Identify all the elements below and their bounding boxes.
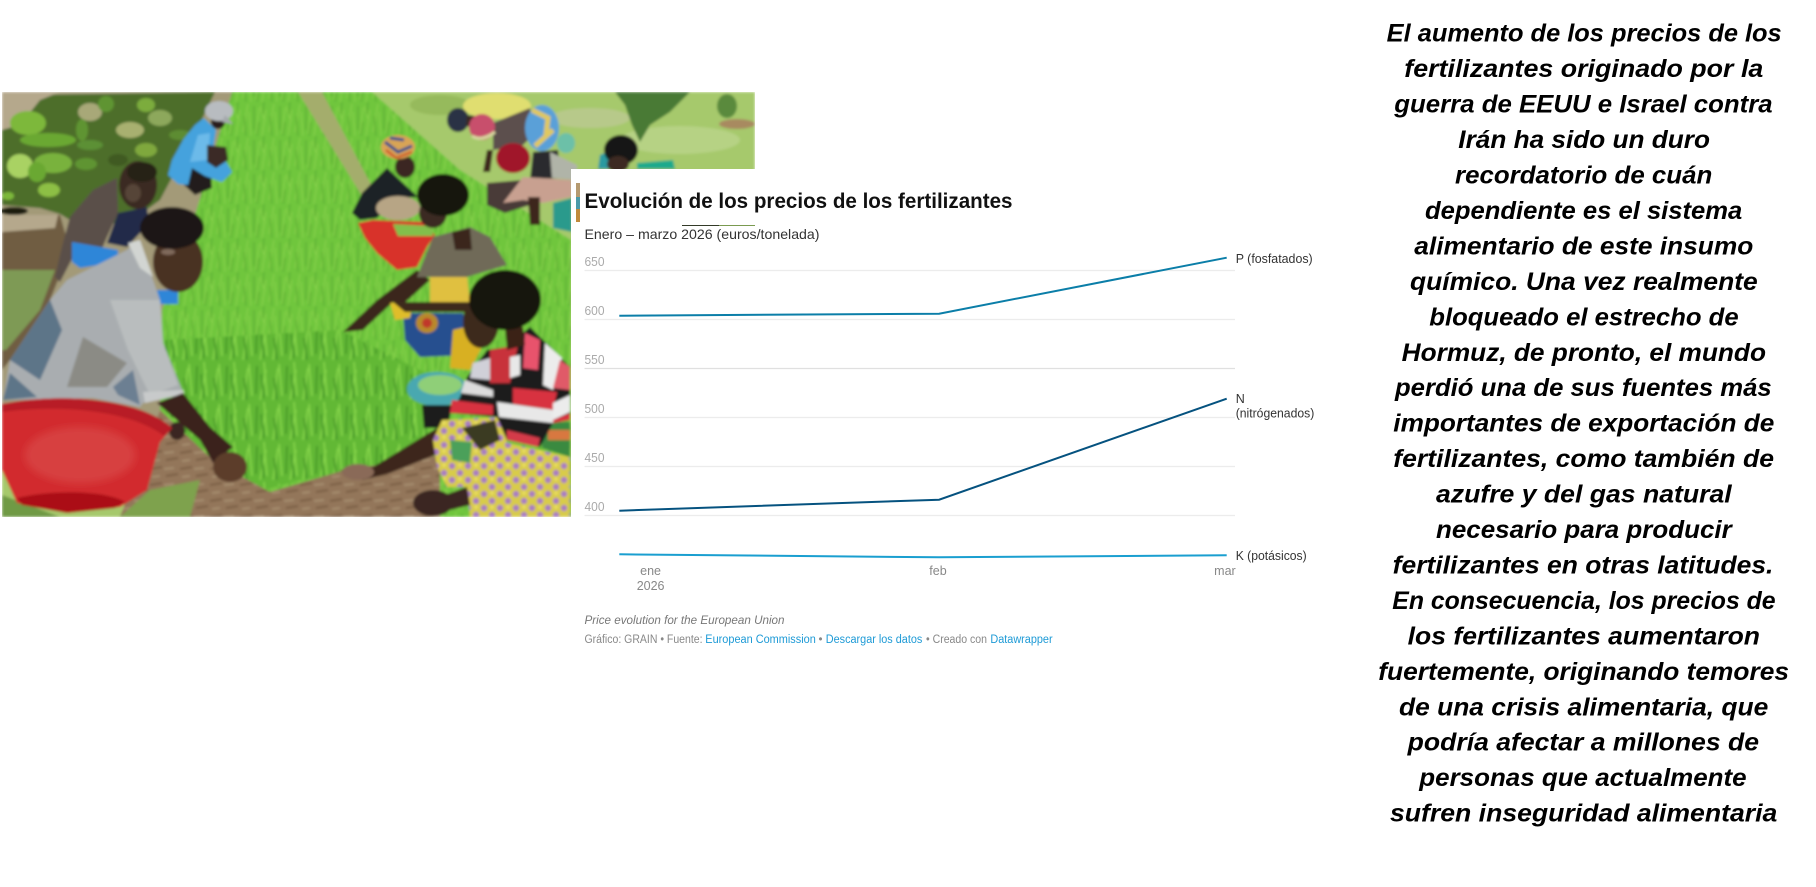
x-axis labels	[637, 564, 1236, 593]
text block: explanatory paragraph: importantes de exportación de	[1393, 410, 1774, 438]
y-axis labels: 550	[584, 353, 605, 367]
text block: explanatory paragraph: recordatorio de cuán	[1455, 162, 1712, 190]
x-axis labels: ene	[640, 564, 661, 578]
chart credits	[584, 634, 1053, 646]
text block: explanatory paragraph: Hormuz, de pronto, el mundo	[1402, 339, 1766, 367]
label P: P (fosfatados)	[1236, 252, 1313, 266]
text block: explanatory paragraph: los fertilizantes aumentaron	[1408, 622, 1760, 650]
bottom soil	[120, 410, 440, 517]
text block: explanatory paragraph: sufren inseguridad alimentaria	[1390, 800, 1777, 828]
x-axis labels: feb	[929, 564, 947, 578]
photo: farmers transplanting rice	[0, 92, 755, 517]
teal bowl	[407, 372, 467, 428]
chart credits: Gráfico: GRAIN • Fuente:	[584, 634, 702, 646]
line: P phosphates	[619, 258, 1227, 316]
text block: explanatory paragraph: Irán ha sido un duro	[1458, 126, 1710, 154]
chart subtitle: Enero – marzo 2026 (euros/tonelada)	[584, 226, 820, 242]
x-axis labels: mar	[1214, 564, 1236, 578]
image line artifact	[682, 225, 755, 226]
text block: explanatory paragraph: podría afectar a millones de	[1407, 729, 1759, 757]
line: K potash	[619, 554, 1227, 557]
worker in brown shirt	[55, 161, 157, 282]
text block: explanatory paragraph: En consecuencia, los precios de	[1392, 587, 1776, 615]
trees and child, far right of photo	[598, 92, 755, 172]
y-axis labels: 450	[584, 451, 605, 465]
group of bending workers, top right	[447, 93, 577, 232]
y-axis labels: 400	[584, 500, 605, 514]
rice strip right	[322, 92, 571, 302]
text block: explanatory paragraph: guerra de EEUU e Israel contra	[1393, 91, 1773, 119]
chart note: Price evolution for the European Union	[584, 613, 785, 627]
x-axis labels: 2026	[637, 579, 665, 593]
dirt path between strips	[298, 92, 374, 196]
darker foreground rice	[165, 330, 440, 490]
chart credits: Descargar los datos	[826, 634, 923, 646]
red basin with seedlings	[358, 220, 435, 270]
label K: K (potásicos)	[1236, 549, 1307, 563]
line: N nitrogen	[619, 399, 1227, 511]
chart credits: •	[818, 634, 823, 646]
chart credits: European Commission	[705, 634, 816, 646]
woman with patterned headscarf	[352, 135, 420, 220]
red basin left	[2, 398, 172, 513]
text block: explanatory paragraph: fertilizantes en otras latitudes.	[1393, 552, 1773, 580]
text block: explanatory paragraph: alimentario de este insumo	[1414, 232, 1753, 260]
woman in striped shirt	[340, 270, 570, 517]
text block: explanatory paragraph: El aumento de los precios de los	[1387, 20, 1782, 48]
chart title: Evolución de los precios de los fertilizantes	[584, 190, 1012, 213]
text block: explanatory paragraph: necesario para producir	[1436, 516, 1733, 544]
field tonal patches	[410, 95, 740, 154]
y-axis labels: 650	[584, 255, 605, 269]
ground left	[2, 215, 70, 370]
woman in olive t-shirt	[343, 174, 507, 370]
chart credits: Datawrapper	[990, 634, 1053, 646]
text block: explanatory paragraph: químico. Una vez realmente	[1410, 268, 1758, 296]
grass under basin	[2, 495, 60, 517]
text block: explanatory paragraph	[1378, 20, 1789, 828]
text block: explanatory paragraph: personas que actualmente	[1418, 764, 1747, 792]
worker in blue jacket	[168, 101, 233, 195]
text block: explanatory paragraph: perdió una de sus fuentes más	[1394, 374, 1772, 402]
label N	[1236, 392, 1314, 420]
text block: explanatory paragraph: azufre y del gas natural	[1436, 481, 1733, 509]
image sliver artifact	[576, 183, 580, 222]
foreground man in grey shirt	[3, 207, 247, 482]
field background	[2, 92, 755, 517]
text block: explanatory paragraph: de una crisis alimentaria, que	[1399, 693, 1768, 721]
soil at left of the rice bed	[2, 92, 240, 420]
text block: explanatory paragraph: bloqueado el estrecho de	[1429, 303, 1739, 331]
text block: explanatory paragraph: fuertemente, originando temores	[1378, 658, 1789, 686]
text block: explanatory paragraph: dependiente es el sistema	[1425, 197, 1742, 225]
y-axis labels: 500	[584, 402, 605, 416]
label N: (nitrógenados)	[1236, 406, 1314, 420]
y-axis labels	[584, 255, 605, 514]
text block: explanatory paragraph: fertilizantes, como también de	[1393, 445, 1774, 473]
tree foliage left	[0, 92, 215, 226]
y-axis labels: 600	[584, 304, 605, 318]
label N: N	[1236, 392, 1245, 406]
text block: explanatory paragraph: fertilizantes originado por la	[1404, 55, 1763, 83]
chart credits: • Creado con	[926, 634, 987, 646]
rice bed left	[160, 92, 571, 517]
chart panel: fertilizer prices	[576, 183, 1314, 646]
